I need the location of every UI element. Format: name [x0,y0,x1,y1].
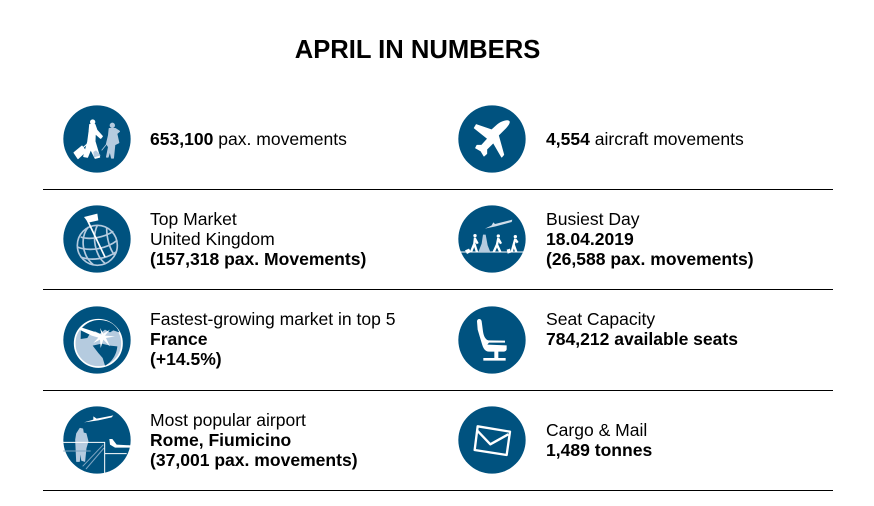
text: cargo and mail [546,420,652,460]
text: most popular airport: Rome, Fiumicino [150,430,291,450]
text: busiest day: (26,588 pax. movements) [546,249,754,269]
text: most popular airport [150,410,358,470]
icon: europe globe with airplane [63,306,131,374]
icon: envelope [458,406,526,474]
text: most popular airport: Most popular airport [150,410,306,430]
icon: globe with flag [63,205,131,273]
text: top market [150,209,366,269]
icon: busiest day crowd and plane [458,205,526,273]
text: busiest day: Busiest Day [546,209,640,229]
text: fastest-growing market: France [150,329,208,349]
text: top market: United Kingdom [150,229,275,249]
icon: passengers walking [63,105,131,173]
text: aircraft movements: 4,554 aircraft movements [546,129,744,149]
text: seat capacity: Seat Capacity [546,309,655,329]
text: busiest day [546,209,754,269]
text: busiest day: 18.04.2019 [546,229,634,249]
text: seat capacity: 784,212 available seats [546,329,738,349]
text: cargo and mail: Cargo & Mail [546,420,647,440]
text: fastest-growing market [150,309,396,369]
text: fastest-growing market: Fastest-growing market in top 5 [150,309,396,329]
text: passenger movements: 653,100 pax. movements [150,129,347,149]
icon: airplane [458,105,526,173]
text: seat capacity [546,309,738,349]
text: cargo and mail: 1,489 tonnes [546,440,652,460]
title: APRIL IN NUMBERS [295,36,540,64]
text: top market: Top Market [150,209,237,229]
icon: airplane seat [458,306,526,374]
text: top market: (157,318 pax. Movements) [150,249,366,269]
text: most popular airport: (37,001 pax. movements) [150,450,358,470]
icon: person watching planes at airport [63,406,131,474]
text: fastest-growing market: (+14.5%) [150,349,222,369]
